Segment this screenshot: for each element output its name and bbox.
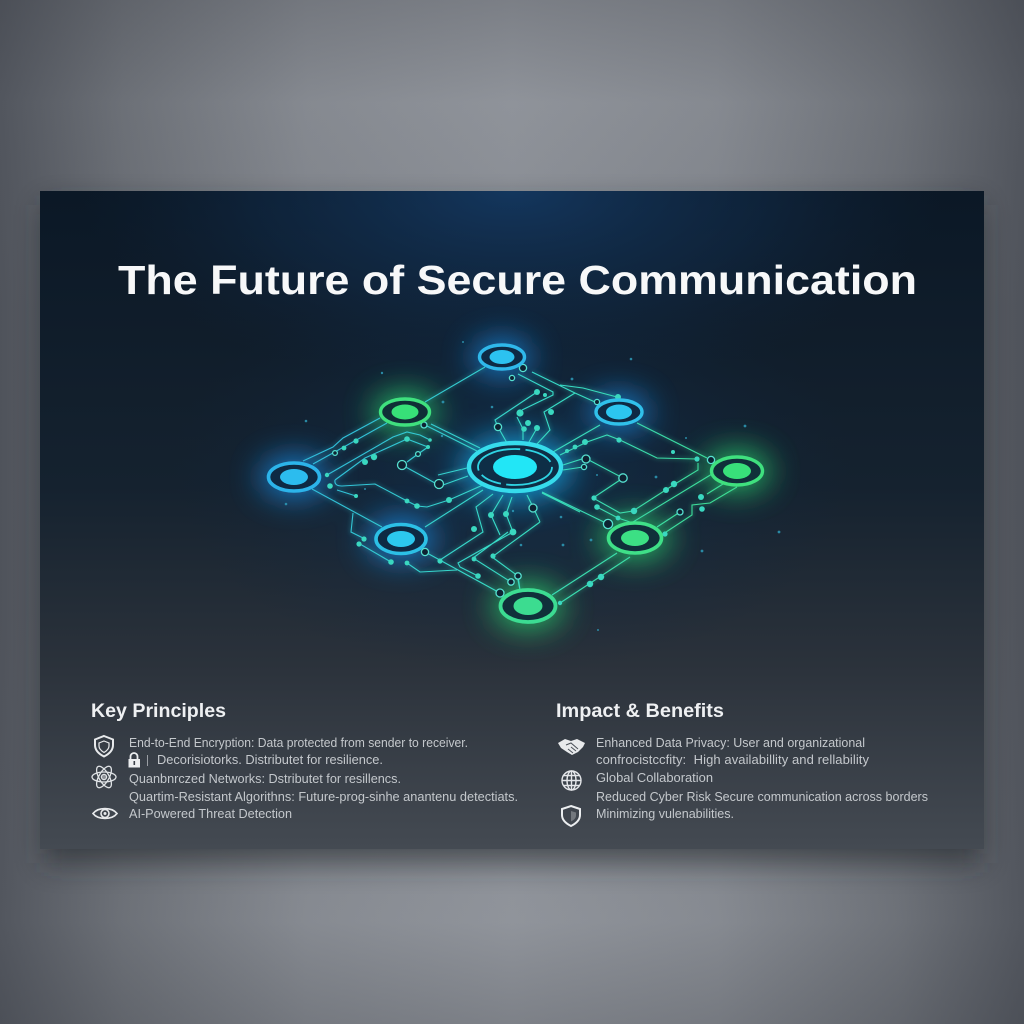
node: lower left blue (376, 524, 426, 554)
icon: handshake (558, 739, 585, 755)
text: quantum networks: Quanbnrczed Networks: Dstributet for resillencs. (129, 771, 401, 786)
title: The Future of Secure Communication (118, 257, 917, 303)
main dark panel (40, 191, 984, 849)
heading: impact and benefits: Impact & Benefits (556, 701, 724, 722)
text: reduced cyber risk: Reduced Cyber Risk Secure communication across borders (596, 789, 928, 804)
text: global collaboration: Global Collaboration (596, 770, 713, 785)
node: central hub (469, 443, 561, 491)
panel: impact and benefits (556, 701, 928, 826)
trace dots (325, 389, 705, 605)
node: top blue (480, 345, 524, 369)
trace ring junctions (333, 364, 715, 597)
node: upper left green (380, 399, 430, 425)
icon: lock (128, 753, 140, 768)
panel: key principles (91, 701, 518, 821)
text: quantum-resistant algorithms: Quartim-Resistant Algorithns: Future-prog-sinhe anantenu detectiats. (129, 789, 518, 804)
node: bottom green (500, 590, 556, 622)
node: right green (712, 457, 762, 485)
node glows (260, 339, 770, 628)
icon: shield (95, 736, 113, 756)
icon: shield benefit (562, 806, 580, 826)
network diagram (260, 339, 780, 631)
text: minimizing vulnerabilities: Minimizing vulenabilities. (596, 806, 734, 821)
icon: eye (93, 809, 117, 818)
icon: globe (562, 771, 581, 790)
icon: atom (92, 764, 116, 790)
heading: key principles: Key Principles (91, 701, 226, 722)
circuit traces (303, 367, 737, 603)
text: enhanced data privacy: Enhanced Data Privacy: User and organizational (596, 735, 865, 750)
text: decentralized networks: Decorisiotorks. Distributet for resilience. (157, 752, 383, 767)
text: availability: confrocistccfity: High availabillity and rellability (596, 752, 870, 767)
panel drop shadow (44, 205, 980, 863)
divider bar (147, 755, 148, 766)
node: lower right green (608, 523, 662, 553)
text: end-to-end encryption: End-to-End Encryption: Data protected from sender to receiver. (129, 735, 468, 750)
node: upper right blue (596, 400, 642, 424)
scattered particles (285, 341, 780, 631)
text: ai threat detection: AI-Powered Threat Detection (129, 806, 292, 821)
node: left blue (268, 463, 320, 491)
